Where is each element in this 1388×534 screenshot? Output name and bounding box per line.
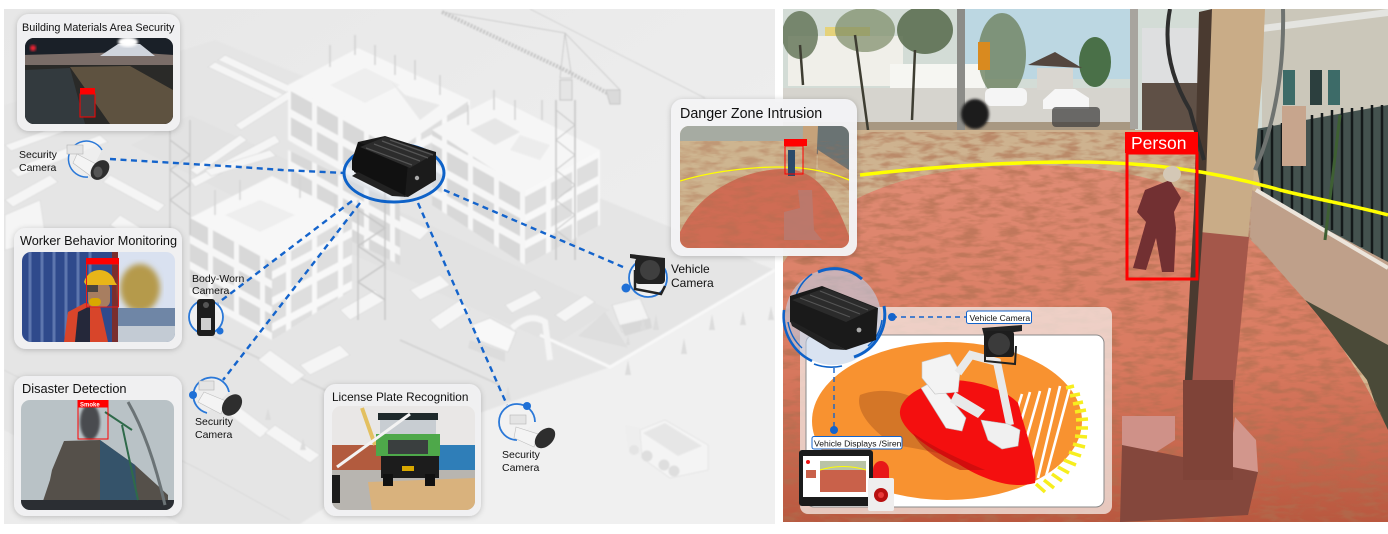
panel: disaster detection	[14, 376, 182, 516]
red danger zone	[900, 380, 1036, 485]
heading: Danger Zone Intrusion	[680, 106, 822, 122]
orange warning zone	[812, 342, 1082, 500]
photo: truck at barrier	[332, 406, 475, 510]
label: security camera right: Camera	[502, 462, 540, 474]
photo: intrusion view	[680, 126, 849, 248]
heading: Building Materials Area Security	[22, 22, 175, 34]
heading: Disaster Detection	[22, 381, 127, 396]
excavator model	[468, 318, 550, 362]
yellow boundary line	[860, 162, 1388, 215]
label: vehicle camera: Vehicle	[671, 262, 710, 276]
sand ripple texture	[783, 130, 1388, 522]
excavator	[921, 354, 1020, 449]
label: security camera lower: Security	[195, 416, 234, 428]
label: vehicle camera: Camera	[671, 276, 714, 290]
label: security camera upper left: Security	[19, 149, 58, 161]
icon: vehicle camera on excavator	[982, 325, 1022, 364]
photo: worker in helmet	[22, 252, 175, 342]
excavator bucket	[1120, 380, 1258, 522]
rubble heap	[578, 312, 628, 348]
red danger zone	[783, 165, 1388, 522]
icon: recorder badge in inset	[784, 269, 885, 367]
connector dot: vehicle camera side	[888, 313, 896, 321]
tag: vehicle camera: Vehicle Camera	[970, 313, 1030, 323]
panel: building materials area security	[17, 14, 180, 131]
tag: vehicle displays and siren: Vehicle Displays /Siren	[814, 438, 902, 448]
icon: security camera right	[499, 402, 559, 452]
panel: construction site isometric scene	[4, 9, 775, 524]
excavator arm pillar	[1168, 9, 1283, 415]
safety cones	[265, 306, 774, 450]
connector: recorder to tags	[834, 317, 966, 428]
label: security camera right: Security	[502, 449, 541, 461]
yellow hatched arc	[1036, 386, 1088, 492]
dump truck	[630, 424, 700, 477]
icon: mobile DVR recorder with ring	[344, 136, 444, 202]
icon: security camera upper left	[67, 141, 113, 184]
person label: Person	[1131, 133, 1186, 153]
icon: body-worn camera	[189, 299, 224, 336]
panel: right photo of danger zone around excavator	[782, 6, 1388, 522]
icon: vehicle display monitor	[799, 450, 873, 506]
site crane	[170, 9, 705, 320]
photo: smoke over building: Smoke	[80, 402, 100, 408]
white stripes in warning zone	[1017, 386, 1070, 480]
heading: License Plate Recognition	[332, 390, 468, 404]
icon: vehicle camera	[622, 254, 667, 297]
label: body-worn camera: Camera	[192, 285, 230, 297]
site ground plate	[4, 121, 774, 523]
panel: danger zone diagram	[800, 307, 1112, 514]
label: security camera lower: Camera	[195, 429, 233, 441]
panel: worker behavior monitoring	[14, 228, 182, 349]
heading: Worker Behavior Monitoring	[20, 234, 177, 248]
building top centre	[288, 35, 470, 265]
photo: smoke over building	[21, 400, 174, 510]
material stacks	[5, 55, 595, 463]
icon: siren	[868, 461, 894, 511]
panel: danger zone intrusion	[671, 99, 857, 256]
connector dot: displays side	[830, 426, 838, 434]
person detection box	[1125, 132, 1198, 279]
wall and iron fence	[1247, 105, 1388, 440]
building lower left	[190, 176, 352, 340]
connection lines: cameras to recorder	[110, 159, 623, 405]
icon: security camera lower	[189, 378, 246, 420]
label: security camera upper left: Camera	[19, 162, 57, 174]
label: body-worn camera: Body-Worn	[192, 273, 244, 285]
photo: night site	[25, 37, 173, 124]
excavator shadow on orange	[859, 391, 1000, 470]
panel: license plate recognition	[324, 384, 481, 516]
excavator near vehicle camera	[612, 298, 652, 336]
building right	[432, 90, 600, 265]
photo background: street and sand	[783, 9, 1388, 406]
